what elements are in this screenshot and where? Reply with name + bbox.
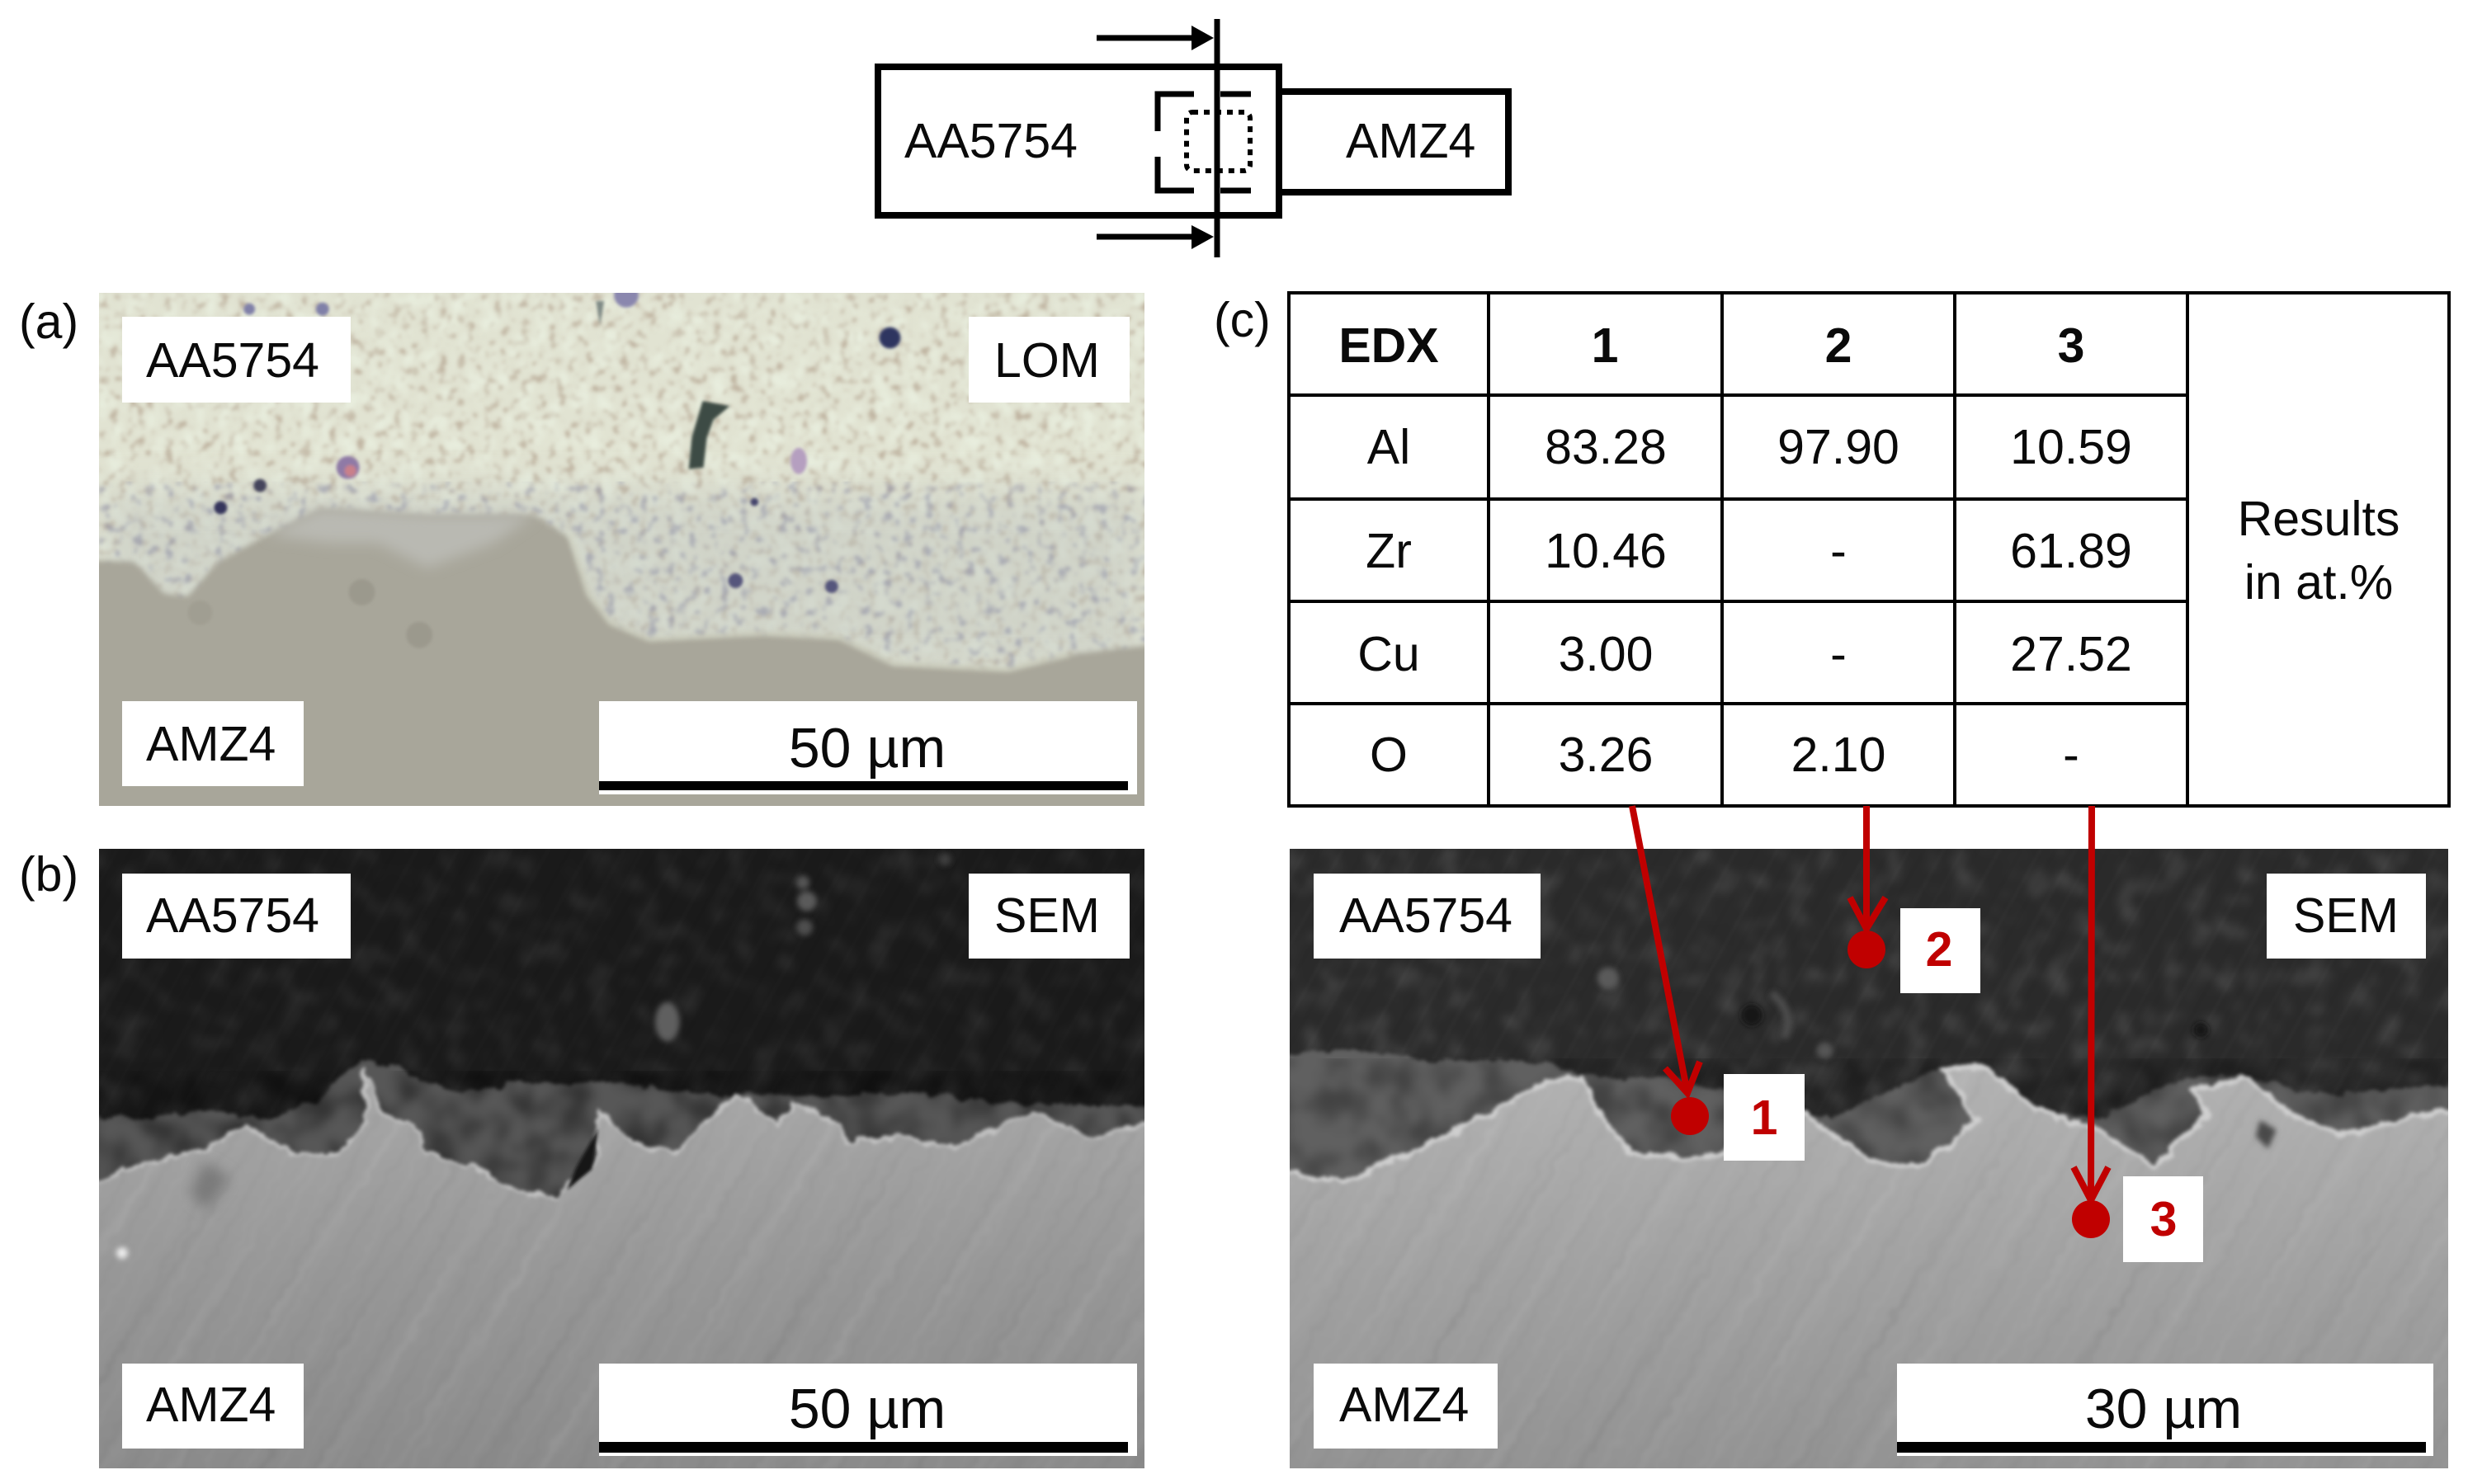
label AA5754: AA5754 [904,114,1078,168]
label AMZ4 [1314,1364,1498,1449]
row Al: 97.90 [1777,420,1899,474]
header row: 2 [1825,318,1852,373]
row O: 3.26 [1559,728,1653,782]
row Cu: 3.00 [1559,627,1653,681]
dashed region outline [1158,94,1251,191]
EDX point 3: 3 [2150,1192,2177,1246]
row Al: Al [1367,420,1410,474]
label SEM [969,874,1130,959]
EDX point 3 [2072,806,2203,1262]
row O [1370,728,2079,782]
results unit note: in at.% [2244,555,2393,610]
row Cu: - [1830,627,1847,681]
row Zr [1366,524,2132,578]
label LOM: LOM [994,333,1100,388]
row Al [1367,420,2132,474]
label AMZ4 [122,1364,304,1449]
EDX point 2: 2 [1926,922,1952,977]
header row: 1 [1592,318,1618,373]
label AA5754: AA5754 [1339,888,1512,943]
row Al: 83.28 [1545,420,1667,474]
arrow: bottom section [1097,225,1214,249]
label AA5754 [122,874,351,959]
row Al: 10.59 [2010,420,2132,474]
label SEM: SEM [994,888,1100,943]
EDX point 1 [1632,806,1805,1161]
LOM image [91,283,1158,814]
panel label (c): (c) [1214,293,1271,347]
row Zr: 61.89 [2010,524,2132,578]
label SEM: SEM [2293,888,2399,943]
panel: (c) SEM micrograph with EDX points [1271,806,2466,1479]
panel label (a): (a) [19,294,78,349]
EDX point 1: 1 [1751,1091,1777,1145]
scale bar 50 µm: 50 µm [789,717,946,780]
label SEM [2267,874,2426,959]
label AMZ4 [122,701,304,786]
EDX table [1289,293,2449,806]
panel: sample schematic [878,19,1508,257]
panel: (b) SEM micrograph [83,841,1158,1479]
row O: - [2063,728,2079,782]
label AMZ4: AMZ4 [146,1378,276,1432]
section line [1215,19,1220,257]
label AA5754 [1314,874,1541,959]
panel label (b): (b) [19,847,78,902]
results unit note: Results [2238,492,2400,546]
row Zr: - [1830,524,1847,578]
sheet AMZ4 [1279,92,1508,192]
row O: 2.10 [1791,728,1885,782]
SEM image [1271,841,2466,1479]
label AA5754 [122,317,351,403]
arrow: top section [1097,26,1214,50]
scale bar 30 µm [1897,1364,2433,1456]
EDX point 2 [1847,806,1980,993]
label LOM [969,317,1130,403]
scale bar 50 µm [599,701,1137,794]
row O: O [1370,728,1408,782]
label AMZ4: AMZ4 [146,717,276,771]
label AA5754: AA5754 [146,333,319,388]
row Cu: 27.52 [2010,627,2132,681]
row Zr: 10.46 [1545,524,1667,578]
label AMZ4: AMZ4 [1346,114,1475,168]
scale bar 50 µm: 50 µm [789,1378,946,1440]
results unit note [2238,492,2400,610]
table grid [1289,293,2449,806]
scale bar 50 µm [599,1364,1137,1456]
SEM image [83,841,1158,1479]
scale bar 30 µm: 30 µm [2085,1378,2242,1440]
header row: EDX [1338,318,1439,373]
row Zr: Zr [1366,524,1412,578]
label AMZ4: AMZ4 [1339,1378,1469,1432]
row Cu: Cu [1357,627,1420,681]
dotted region outline [1187,112,1250,171]
panel: (a) LOM micrograph [91,283,1158,814]
row Cu [1357,627,2132,681]
header row [1338,318,2084,373]
label AA5754: AA5754 [146,888,319,943]
header row: 3 [2058,318,2084,373]
sheet AA5754 [878,67,1279,215]
